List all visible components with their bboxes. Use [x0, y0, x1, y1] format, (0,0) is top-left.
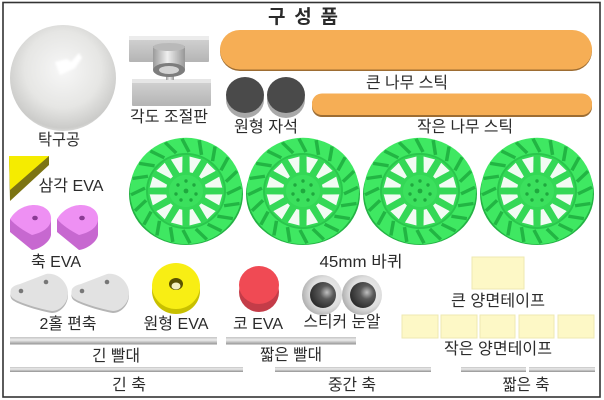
- icon: round magnets: [226, 77, 305, 118]
- label: large double-sided tape: 큰 양면테이프: [451, 292, 545, 310]
- label: axle EVA: 축 EVA: [31, 253, 81, 271]
- label: angle bracket: 각도 조절판: [130, 108, 208, 126]
- icon: small double-sided tapes: [402, 315, 594, 338]
- label: big wooden stick: 큰 나무 스틱: [366, 74, 448, 92]
- label: two-hole cam: 2홀 편축: [40, 315, 96, 333]
- icon: ping pong ball: [10, 25, 116, 131]
- label: nose EVA: 코 EVA: [233, 316, 283, 333]
- icon: medium axle: [275, 367, 431, 372]
- label: ping pong ball: 탁구공: [38, 131, 80, 149]
- icon: big wooden stick: [220, 30, 592, 71]
- icon: long straw: [10, 337, 217, 344]
- icon: 45mm wheels: [129, 138, 594, 245]
- icon: round EVA: [152, 263, 200, 314]
- label: short axles: 짧은 축: [502, 376, 550, 394]
- label: triangle EVA: 삼각 EVA: [38, 177, 104, 195]
- label: small double-sided tapes: 작은 양면테이프: [444, 340, 552, 358]
- icon: short straw: [226, 337, 356, 344]
- label: short straw: 짧은 빨대: [260, 346, 322, 364]
- title: 구 성 품: [268, 6, 338, 28]
- icon: sticker eyes: [302, 275, 382, 315]
- icon: triangle EVA: [9, 156, 49, 201]
- label: small wooden stick: 작은 나무 스틱: [417, 118, 513, 136]
- icon: axle EVA: [10, 205, 98, 250]
- icon: angle bracket: [129, 36, 211, 106]
- icon: small wooden stick: [312, 94, 592, 117]
- label: 45mm wheels: 45mm 바퀴: [320, 253, 402, 271]
- icon: nose EVA: [239, 266, 279, 312]
- icon: two-hole cam: [10, 274, 129, 313]
- label: sticker eyes: 스티커 눈알: [304, 313, 381, 331]
- icon: long axle: [10, 367, 243, 372]
- icon: short axles: [461, 367, 595, 372]
- label: round magnets: 원형 자석: [234, 118, 298, 136]
- label: long straw: 긴 빨대: [92, 347, 140, 365]
- label: round EVA: 원형 EVA: [144, 315, 209, 333]
- icon: large double-sided tape: [472, 257, 524, 289]
- label: medium axle: 중간 축: [328, 376, 376, 394]
- label: long axle: 긴 축: [112, 376, 146, 394]
